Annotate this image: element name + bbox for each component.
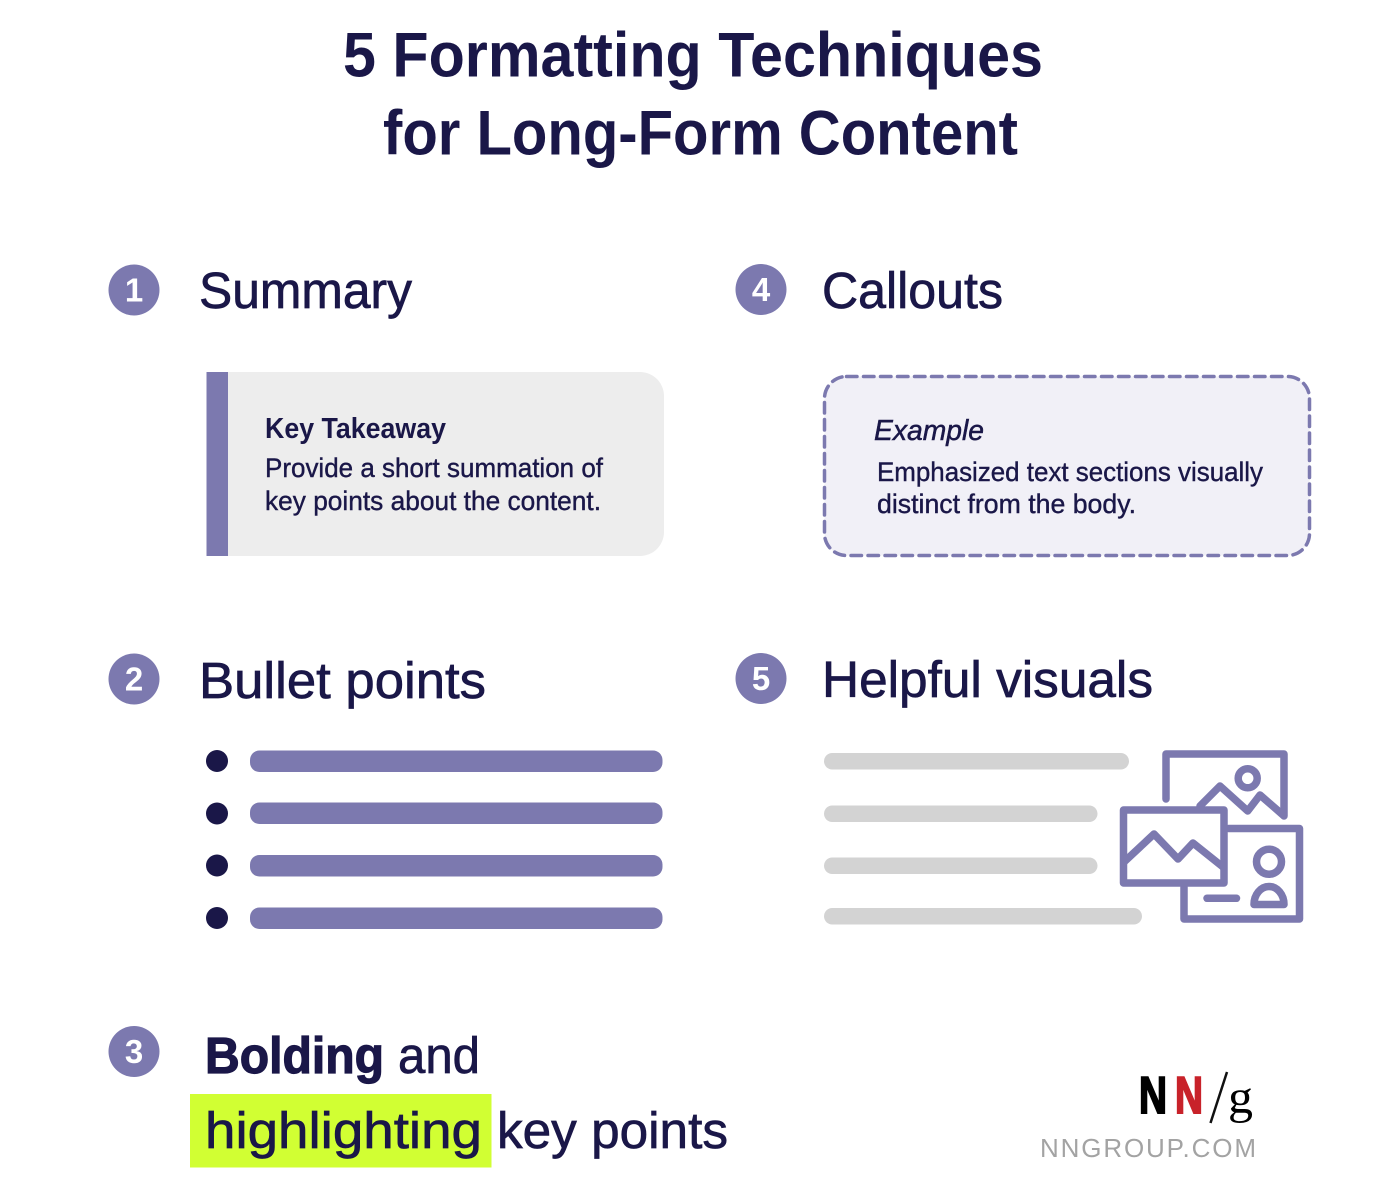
example callout card [824,376,1310,556]
key takeaway card [206,372,664,556]
example callout card: Emphasized text sections visually [877,457,1263,487]
title [343,20,1043,168]
icon: stacked images [1124,754,1300,919]
number badge 4: 4 [752,271,771,308]
title: 5 Formatting Techniques [343,20,1043,90]
number badge 2 [108,654,160,704]
number badge 3: 3 [125,1033,143,1070]
placeholder text lines [824,753,1142,924]
number badge 5: 5 [752,660,770,697]
heading: Bolding and highlighting key points: and [398,1027,480,1084]
logo: NN/g [1040,1067,1256,1163]
panel: callouts [736,262,1310,556]
panel: bolding and highlighting [108,1026,728,1168]
number badge 2: 2 [125,660,143,698]
example callout card: Example [874,415,984,447]
logo: NN/g: g [1228,1071,1253,1124]
heading: Bolding and highlighting key points: key points [497,1102,728,1159]
heading: Callouts: Callouts [822,262,1003,319]
number badge 3 [108,1026,160,1077]
number badge 1: 1 [125,272,143,308]
heading: Bolding and highlighting key points: Bolding [205,1027,384,1084]
title: for Long-Form Content [383,98,1018,168]
example callout card: distinct from the body. [877,489,1136,519]
panel: bullet points [108,652,662,929]
heading: Bolding and highlighting key points: highlighting [205,1102,482,1159]
heading: Bolding and highlighting key points [205,1027,728,1159]
heading: Bullet points: Bullet points [199,652,486,709]
highlight swatch [190,1094,492,1168]
key takeaway card: Provide a short summation of [265,453,603,483]
key takeaway card: key points about the content. [265,486,601,516]
logo: NN/g: N [1175,1067,1203,1125]
number badge 5 [736,653,786,704]
key takeaway card: Key Takeaway [265,413,446,445]
heading: Helpful visuals: Helpful visuals [822,651,1153,708]
number badge 1 [108,264,160,316]
heading: Summary: Summary [199,262,412,319]
panel: helpful visuals [736,651,1300,924]
logo: NN/g: NNGROUP.COM [1040,1133,1256,1163]
logo: NN/g: N [1139,1067,1167,1125]
number badge 4 [736,264,786,315]
panel: summary [108,262,664,556]
bullet list illustration [206,750,662,929]
